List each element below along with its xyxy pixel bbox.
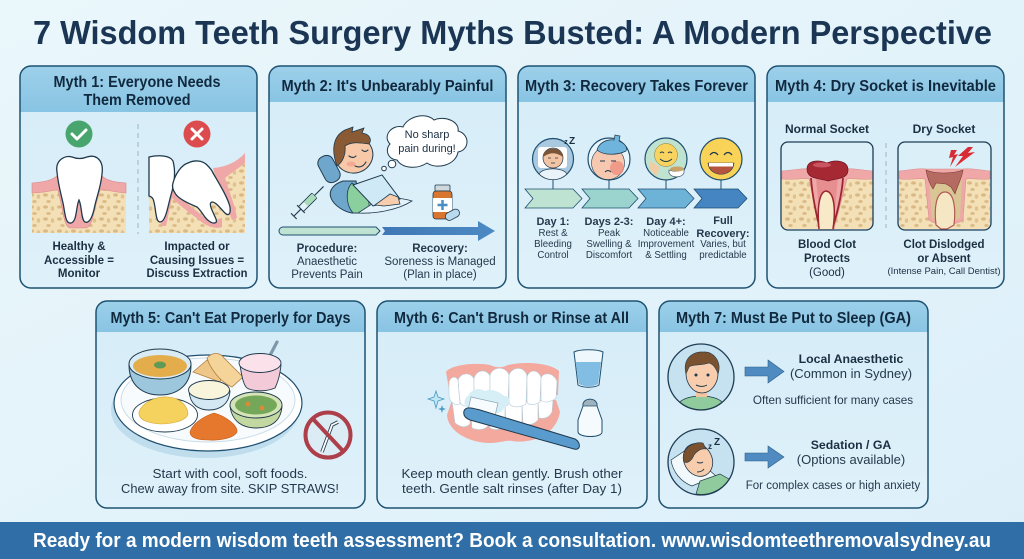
caption: soft foods: Chew away from site. SKIP STRAWS! xyxy=(121,482,339,496)
icon: sleeping patient: Z xyxy=(714,437,720,448)
heading: myth 4: Myth 4: Dry Socket is Inevitable xyxy=(775,78,996,95)
caption: full recovery: Varies, but xyxy=(700,239,746,250)
icon: day 1 sleeping: Z xyxy=(569,136,575,147)
icon: full recovery smile xyxy=(700,138,742,189)
timeline: chevrons xyxy=(525,189,747,208)
caption: full recovery: predictable xyxy=(699,250,747,261)
panel: myth 7 xyxy=(659,301,928,508)
icon: awake patient xyxy=(668,344,734,410)
caption: days 2-3: Days 2-3: xyxy=(585,216,633,228)
caption: day 4: Improvement xyxy=(638,239,695,250)
caption: healthy: Accessible = xyxy=(44,255,114,267)
illustration: normal socket xyxy=(781,142,873,230)
panel: myth 6 xyxy=(377,301,647,508)
title: 7 Wisdom Teeth Surgery Myths Busted: A Modern Perspective xyxy=(33,14,992,51)
caption: day 4: & Settling xyxy=(645,250,687,261)
timeline: procedure bar xyxy=(279,227,380,235)
arrow: to local anaesthetic xyxy=(745,360,784,383)
caption: procedure: Prevents Pain xyxy=(291,269,363,281)
text: sedation: (Options available) xyxy=(797,452,905,467)
icon: day 1 sleeping: z xyxy=(564,139,568,146)
caption: blood clot protects: Protects xyxy=(804,253,850,265)
illustration: impacted tooth xyxy=(149,153,245,233)
text: for complex cases: For complex cases or high anxiety xyxy=(746,480,920,492)
panel: myth 4 xyxy=(767,66,1004,288)
caption: day 4: Noticeable xyxy=(643,228,689,239)
icon: salt shaker xyxy=(578,399,602,436)
illustration: relaxed patient in chair xyxy=(315,127,412,213)
icon: water glass xyxy=(574,350,603,387)
caption: soft foods: Start with cool, soft foods. xyxy=(152,467,308,481)
caption: procedure: Anaesthetic xyxy=(297,256,357,268)
caption: days 2-3: Swelling & xyxy=(586,239,632,250)
icon: days 2-3 ice pack xyxy=(588,135,630,189)
caption: full recovery: Full xyxy=(713,215,733,227)
icon: medicine bottle and pill xyxy=(433,185,461,222)
heading: myth 7: Myth 7: Must Be Put to Sleep (GA) xyxy=(676,310,911,327)
caption: clot dislodged: (Intense Pain, Call Dentist) xyxy=(888,266,1000,277)
icon: green check xyxy=(66,120,92,148)
callout: thought bubble xyxy=(382,116,467,171)
caption: blood clot protects: Blood Clot xyxy=(798,239,856,251)
caption: recovery: Recovery: xyxy=(412,243,468,255)
caption: impacted: Discuss Extraction xyxy=(146,268,248,280)
panel: myth 5 xyxy=(96,301,365,508)
text: sedation: Sedation / GA xyxy=(811,438,891,452)
illustration: dry socket xyxy=(898,142,991,230)
caption: healthy: Healthy & xyxy=(52,241,106,253)
text: local anaesthetic: Local Anaesthetic xyxy=(799,352,904,366)
footer banner xyxy=(0,522,1024,559)
caption: full recovery: Recovery: xyxy=(696,228,750,240)
caption: blood clot protects: (Good) xyxy=(809,267,845,279)
icon: no straws xyxy=(306,412,350,458)
icon: sleeping patient: z xyxy=(708,442,712,451)
illustration: teeth and toothbrush xyxy=(428,363,579,449)
heading: myth 1: Myth 1: Everyone Needs xyxy=(54,74,221,91)
caption: clot dislodged: Clot Dislodged xyxy=(903,239,985,251)
icon: sleeping patient xyxy=(668,429,734,495)
caption: day 1: Rest & xyxy=(538,228,568,239)
arrow: recovery xyxy=(382,221,495,241)
arrow: to sedation xyxy=(745,446,784,468)
caption: day 1: Bleeding xyxy=(534,239,572,250)
panel: myth 2 xyxy=(269,66,506,288)
caption: clot dislodged: or Absent xyxy=(917,253,971,265)
caption: days 2-3: Discomfort xyxy=(586,250,632,261)
panel: myth 1 xyxy=(20,66,257,288)
caption: day 1: Control xyxy=(537,250,569,261)
heading: myth 3: Myth 3: Recovery Takes Forever xyxy=(525,78,748,95)
caption: healthy: Monitor xyxy=(58,268,101,280)
callout: thought bubble: No sharp xyxy=(405,129,449,141)
caption: keep mouth clean: Keep mouth clean gently. Brush other xyxy=(402,467,622,481)
caption: day 4: Day 4+: xyxy=(646,216,686,228)
caption: recovery: (Plan in place) xyxy=(403,269,477,281)
callout: thought bubble: pain during! xyxy=(398,143,456,155)
heading: myth 2: Myth 2: It's Unbearably Painful xyxy=(282,78,494,95)
illustration: healthy tooth xyxy=(32,156,126,233)
caption: impacted: Impacted or xyxy=(164,241,230,253)
caption: procedure: Procedure: xyxy=(297,243,357,255)
footer banner: Ready for a modern wisdom teeth assessment? Book a consultation. www.wisdomteethremovalsydney.au xyxy=(33,530,991,552)
label: dry socket: Dry Socket xyxy=(913,122,975,136)
heading: myth 1: Them Removed xyxy=(84,92,190,109)
icon: day 4 improving xyxy=(645,138,687,189)
caption: days 2-3: Peak xyxy=(598,228,620,239)
text: local anaesthetic: (Common in Sydney) xyxy=(790,366,912,381)
text: often sufficient: Often sufficient for many cases xyxy=(753,394,913,407)
icon: day 1 sleeping xyxy=(532,136,575,189)
icon: red cross xyxy=(184,120,210,148)
panel: myth 3 xyxy=(518,66,755,288)
heading: myth 5: Myth 5: Can't Eat Properly for Days xyxy=(110,310,351,327)
caption: impacted: Causing Issues = xyxy=(150,255,244,267)
caption: recovery: Soreness is Managed xyxy=(384,256,496,268)
illustration: plate of soft foods xyxy=(111,342,302,458)
caption: keep mouth clean: teeth. Gentle salt rinses (after Day 1) xyxy=(402,482,622,496)
label: normal socket: Normal Socket xyxy=(785,122,869,136)
heading: myth 6: Myth 6: Can't Brush or Rinse at All xyxy=(394,310,629,327)
caption: day 1: Day 1: xyxy=(536,216,570,228)
icon: syringe xyxy=(290,183,327,220)
